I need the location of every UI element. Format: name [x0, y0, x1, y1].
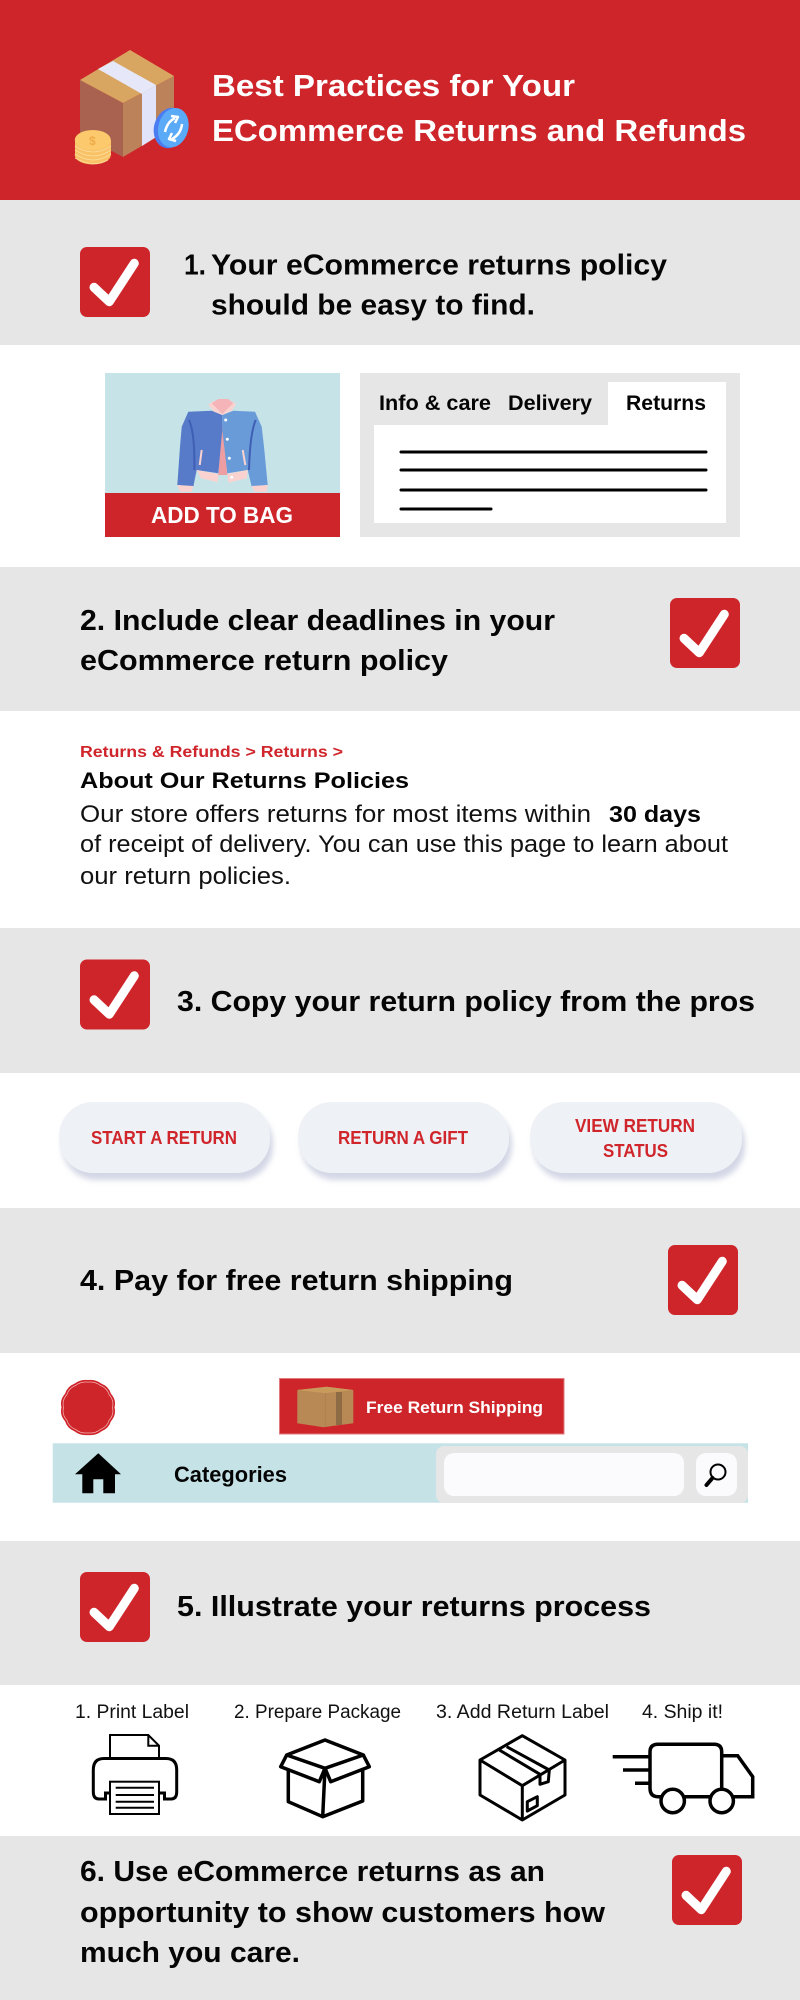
icon: jacket	[177, 399, 268, 492]
panel: section 5 heading	[0, 1541, 800, 1685]
text block: returns policy excerpt: Our store offers returns for most items within	[80, 801, 591, 828]
panel: section 1 heading	[0, 200, 800, 345]
heading 1	[184, 250, 667, 322]
text block: returns policy excerpt: About Our Returns Policies	[80, 768, 409, 793]
button: return a gift	[298, 1102, 512, 1180]
heading 6: opportunity to show customers how	[80, 1897, 606, 1929]
button label: ADD TO BAG	[151, 502, 293, 528]
text block: returns policy excerpt: Returns & Refunds > Returns >	[80, 744, 343, 761]
heading 5: 5. Illustrate your returns process	[177, 1591, 651, 1623]
button: start a return: START A RETURN	[91, 1127, 237, 1148]
icon: scalloped badge	[61, 1380, 115, 1435]
text block: returns policy excerpt: our return policies.	[80, 863, 291, 890]
heading 1: Your eCommerce returns policy	[211, 250, 667, 282]
icon: open box	[281, 1740, 369, 1817]
step 1: print label	[75, 1702, 189, 1814]
icon: printer	[93, 1735, 177, 1814]
button: view return status: VIEW RETURN	[575, 1115, 695, 1136]
step 2: prepare package: 2. Prepare Package	[234, 1702, 401, 1723]
icon: red checkbox	[668, 1245, 738, 1315]
heading 6: much you care.	[80, 1937, 300, 1969]
step 4: ship it: 4. Ship it!	[642, 1702, 723, 1723]
navigation bar mockup	[53, 1443, 748, 1503]
product card	[105, 373, 340, 537]
icon: red checkbox	[80, 247, 150, 317]
heading 1: 1.	[184, 250, 206, 282]
icon: red checkbox	[672, 1855, 742, 1925]
button: return a gift: RETURN A GIFT	[338, 1127, 469, 1148]
icon: red checkbox	[80, 1572, 150, 1642]
step 4: ship it	[613, 1702, 753, 1813]
heading 2	[80, 605, 555, 677]
title: Best Practices for Your	[212, 68, 575, 103]
text block: returns policy excerpt: 30 days	[609, 801, 701, 827]
banner: free return shipping: Free Return Shipping	[366, 1398, 543, 1417]
search area	[436, 1446, 748, 1503]
icon: small parcel	[297, 1387, 353, 1427]
button: view return status: STATUS	[603, 1140, 668, 1161]
panel: product page mockup	[105, 373, 740, 537]
icon: delivery truck	[613, 1744, 753, 1813]
heading 1: should be easy to find.	[211, 290, 535, 322]
heading 4: 4. Pay for free return shipping	[80, 1265, 513, 1297]
heading 3: 3. Copy your return policy from the pros	[177, 986, 755, 1018]
step 3: add return label: 3. Add Return Label	[436, 1702, 609, 1723]
tabbed info box: Delivery	[508, 391, 592, 415]
title: ECommerce Returns and Refunds	[212, 113, 746, 148]
panel: section 6 heading	[0, 1836, 800, 2000]
icon: home	[75, 1453, 121, 1493]
panel: section 4 heading	[0, 1208, 800, 1353]
panel: section 2 heading	[0, 567, 800, 711]
text block: returns policy excerpt	[80, 744, 728, 890]
icon: sealed box	[480, 1736, 565, 1820]
step 3: add return label	[436, 1702, 609, 1820]
heading 6	[80, 1856, 606, 1969]
header banner	[0, 0, 800, 200]
step 1: print label: 1. Print Label	[75, 1702, 189, 1723]
tabbed info box: Returns	[626, 391, 706, 415]
icon: red checkbox	[80, 960, 150, 1030]
icon: parcel with coins and return arrows: $	[89, 134, 96, 148]
nav label: Categories	[174, 1462, 287, 1487]
banner: free return shipping	[280, 1378, 564, 1434]
panel: section 3 heading	[0, 928, 800, 1073]
text block: returns policy excerpt: of receipt of delivery. You can use this page to learn about	[80, 831, 728, 858]
heading 6: 6. Use eCommerce returns as an	[80, 1856, 545, 1888]
step 2: prepare package	[234, 1702, 401, 1817]
icon: red checkbox	[670, 598, 740, 668]
tabbed info box	[360, 373, 740, 537]
button: view return status	[530, 1102, 745, 1180]
heading 2: 2. Include clear deadlines in your	[80, 605, 555, 637]
icon: parcel with coins and return arrows	[75, 50, 193, 164]
title	[212, 68, 746, 148]
heading 2: eCommerce return policy	[80, 645, 448, 677]
tabbed info box: Info & care	[379, 391, 491, 415]
button: start a return	[59, 1102, 273, 1180]
return action buttons	[59, 1102, 745, 1180]
